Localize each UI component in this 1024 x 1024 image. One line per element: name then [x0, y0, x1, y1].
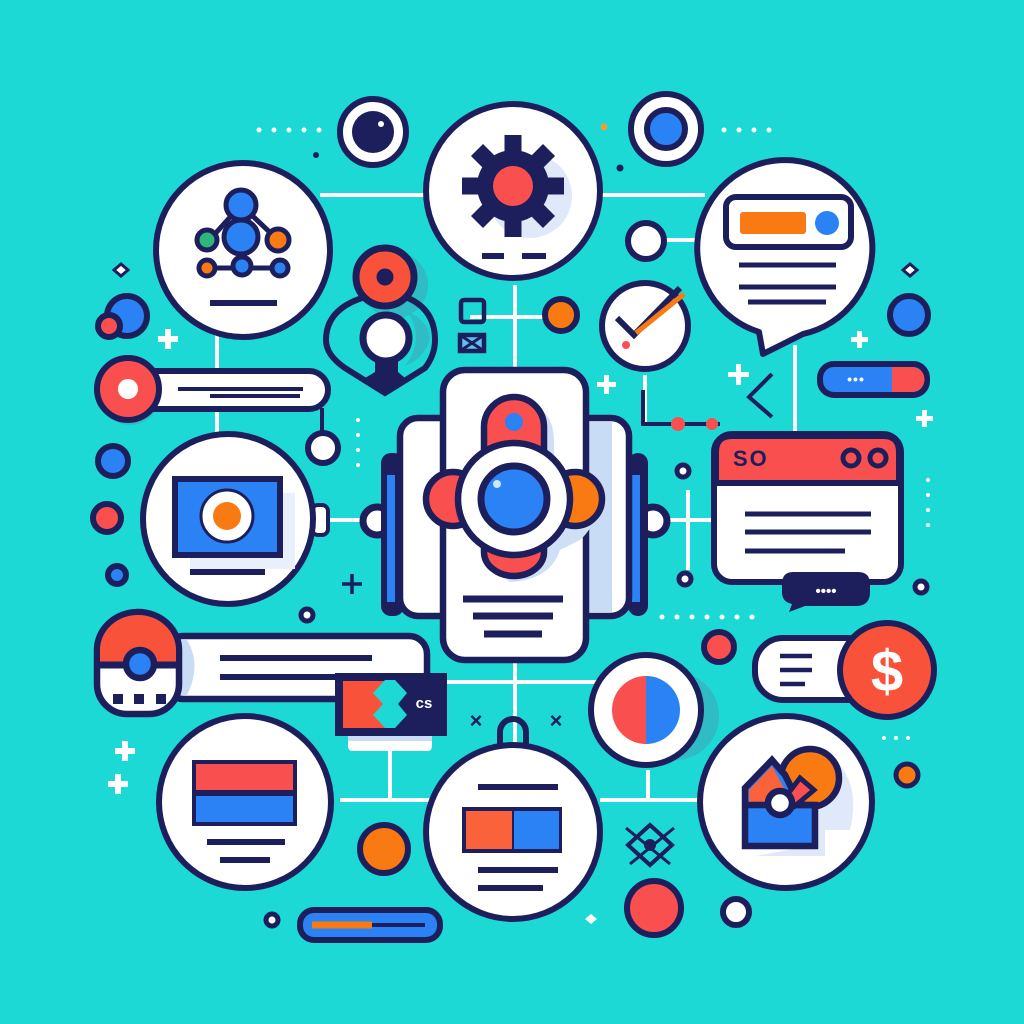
panel: red flag card	[335, 673, 447, 751]
panel: browser window: ••••	[815, 583, 837, 600]
panel: profile bar	[97, 358, 338, 463]
panel: browser window	[714, 434, 901, 612]
panel: network	[156, 163, 330, 337]
icon: right dot	[890, 296, 928, 334]
icon: check mark	[602, 283, 688, 369]
icon: half circle	[591, 655, 701, 765]
text: ×	[550, 708, 562, 733]
panel: speech bubble	[697, 160, 872, 354]
icon: left dots	[98, 296, 147, 337]
panel: central card	[363, 370, 667, 660]
panel: dollar pill	[755, 623, 934, 717]
panel: red flag card: cs	[416, 695, 432, 712]
icon: cross marks: ×	[470, 708, 482, 733]
icon: diamond	[626, 825, 674, 865]
icon: red dot	[704, 632, 734, 662]
icon: orange dot	[545, 299, 577, 331]
panel: image circle	[143, 434, 328, 604]
panel: toggle pill: •••	[847, 371, 865, 387]
icon: progress bar	[300, 910, 440, 940]
panel: split chart circle	[426, 719, 600, 919]
icon: bottom left dot	[266, 914, 278, 926]
panel: pokeball bar	[97, 612, 427, 714]
icon: top right ring	[631, 94, 701, 164]
icon: top left ring	[340, 99, 406, 165]
icon: small connectors	[301, 465, 927, 621]
icon: location pin	[326, 248, 435, 393]
icon: gear	[462, 135, 564, 237]
arrow: left chevron	[643, 374, 772, 431]
icon: white dot	[723, 899, 749, 925]
panel: bars circle	[159, 716, 331, 888]
icon: small squares	[460, 300, 484, 351]
panel: gear	[426, 104, 600, 278]
icon: red ball	[627, 881, 681, 935]
icon: left column dots	[93, 446, 128, 584]
icon: orange bottom dot	[360, 825, 408, 873]
panel: house circle	[700, 716, 872, 888]
panel: dollar pill: $	[871, 639, 903, 704]
icon: small ring connector	[628, 223, 664, 259]
icon: orange side dot	[896, 764, 918, 786]
panel: browser window: SO	[733, 446, 769, 471]
panel: toggle pill	[820, 364, 927, 395]
